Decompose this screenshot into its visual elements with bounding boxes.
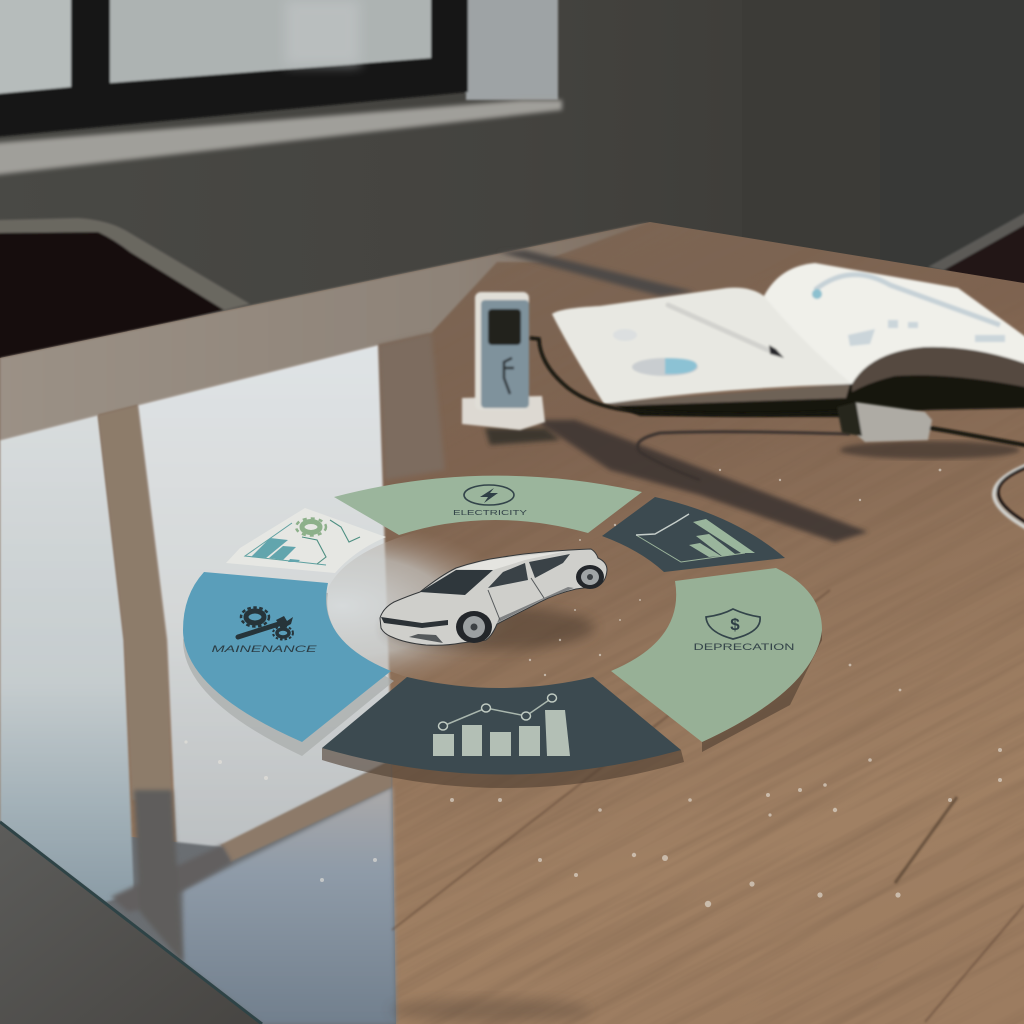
background wall bbox=[0, 0, 1024, 420]
right window pane bbox=[110, 0, 431, 83]
glass underlay bbox=[0, 760, 396, 1024]
trend line bbox=[443, 698, 552, 726]
pen bbox=[668, 305, 784, 358]
front bumper and headlight bbox=[381, 617, 448, 628]
wheel center glass bbox=[324, 522, 680, 690]
sparkle dust on glass bbox=[184, 469, 1002, 907]
trend line bbox=[636, 514, 689, 535]
plug cable bbox=[930, 428, 1024, 446]
page sketch lines bbox=[815, 275, 1000, 325]
bars bbox=[689, 519, 755, 557]
floor board seam lines bbox=[392, 590, 1024, 1022]
right chair bbox=[928, 210, 1024, 295]
chart axis bbox=[636, 535, 745, 562]
plug shadow on table bbox=[840, 441, 1020, 459]
charger base bbox=[462, 396, 545, 430]
car shadow on table bbox=[385, 606, 595, 650]
segment: dark trend chart bbox=[602, 497, 785, 572]
sunlight shadow lower center bbox=[390, 998, 590, 1022]
cost wheel bbox=[183, 476, 822, 788]
table top bbox=[0, 222, 1024, 1024]
glass reflection: lower pane bbox=[183, 787, 396, 1024]
front side window bbox=[488, 563, 528, 588]
windshield bbox=[420, 570, 493, 595]
window bbox=[0, 0, 558, 137]
charging cable bbox=[530, 338, 840, 415]
glass reflection: wood strip bbox=[98, 405, 172, 800]
label: depreciation: DEPRECATION bbox=[694, 642, 795, 653]
icon: gears and wrench bbox=[238, 608, 293, 640]
chart axes bbox=[245, 523, 326, 565]
glass reflection: center pane bbox=[138, 345, 392, 847]
charging station bbox=[462, 292, 545, 430]
window reveal bbox=[466, 0, 558, 100]
door line bbox=[488, 578, 544, 620]
electric car bbox=[380, 549, 607, 645]
label: electricity: ELECTRICITY bbox=[453, 510, 528, 517]
trend lines bbox=[330, 520, 360, 542]
car body bbox=[380, 549, 607, 645]
segment shadows bbox=[183, 582, 822, 788]
body sill shading bbox=[497, 587, 574, 623]
wall panel shading bbox=[742, 0, 1024, 290]
glass reflection: wood band bbox=[220, 760, 392, 862]
icon: lightning bolt in circle bbox=[464, 485, 514, 505]
cable loop at right edge bbox=[994, 464, 1024, 530]
icon: green gear bbox=[296, 518, 326, 536]
bars bbox=[251, 538, 300, 562]
window sill bbox=[0, 100, 562, 175]
table edge below glass bbox=[0, 822, 262, 1024]
glass reflection: dark cross beam bbox=[111, 790, 232, 963]
rear wheel bbox=[576, 565, 604, 589]
pie chart bbox=[632, 358, 698, 376]
front lower grille bbox=[409, 634, 443, 643]
right page layers bbox=[852, 347, 1024, 392]
pale page marks bbox=[613, 329, 637, 341]
trend markers bbox=[438, 694, 556, 730]
front wheel bbox=[456, 611, 492, 643]
icon: shield with dollar bbox=[706, 609, 760, 639]
label: maintenance: MAINENANCE bbox=[212, 644, 318, 655]
charger body bbox=[475, 292, 529, 410]
charger socket symbol bbox=[504, 358, 514, 394]
glass reflection: left pane bbox=[0, 415, 134, 902]
bars bbox=[433, 710, 570, 756]
left window pane bbox=[0, 0, 71, 94]
bright pane reflection bbox=[285, 0, 360, 65]
rear side window bbox=[529, 554, 570, 578]
charger screen bbox=[488, 309, 521, 345]
strip beside glass bbox=[378, 333, 445, 480]
right page bbox=[764, 263, 1024, 384]
open notebook bbox=[552, 263, 1024, 417]
page teal mark bbox=[812, 289, 822, 299]
car roof highlight bbox=[456, 551, 567, 570]
table rim light edge bbox=[0, 222, 650, 440]
left chair bbox=[0, 218, 250, 365]
segment: maintenance bbox=[183, 572, 391, 742]
notebook underside shadow bbox=[612, 360, 1024, 417]
left page bbox=[552, 288, 852, 404]
charger face bbox=[481, 300, 529, 408]
segment: depreciation bbox=[611, 568, 822, 742]
segment: pale chart card bbox=[226, 508, 386, 573]
segment: electricity bbox=[334, 476, 642, 535]
page table blocks bbox=[848, 320, 1005, 346]
segment: dark bar chart bbox=[322, 677, 681, 775]
shadow of charger on table bbox=[485, 420, 868, 542]
icon: shield with dollar: $ bbox=[730, 615, 740, 634]
plug connector bbox=[837, 402, 1024, 446]
wood grain texture bbox=[0, 222, 1024, 1024]
window frame bbox=[0, 0, 468, 137]
cable shadow on table bbox=[638, 432, 850, 480]
table far shadow band bbox=[498, 250, 695, 296]
left page edge bbox=[604, 384, 850, 406]
